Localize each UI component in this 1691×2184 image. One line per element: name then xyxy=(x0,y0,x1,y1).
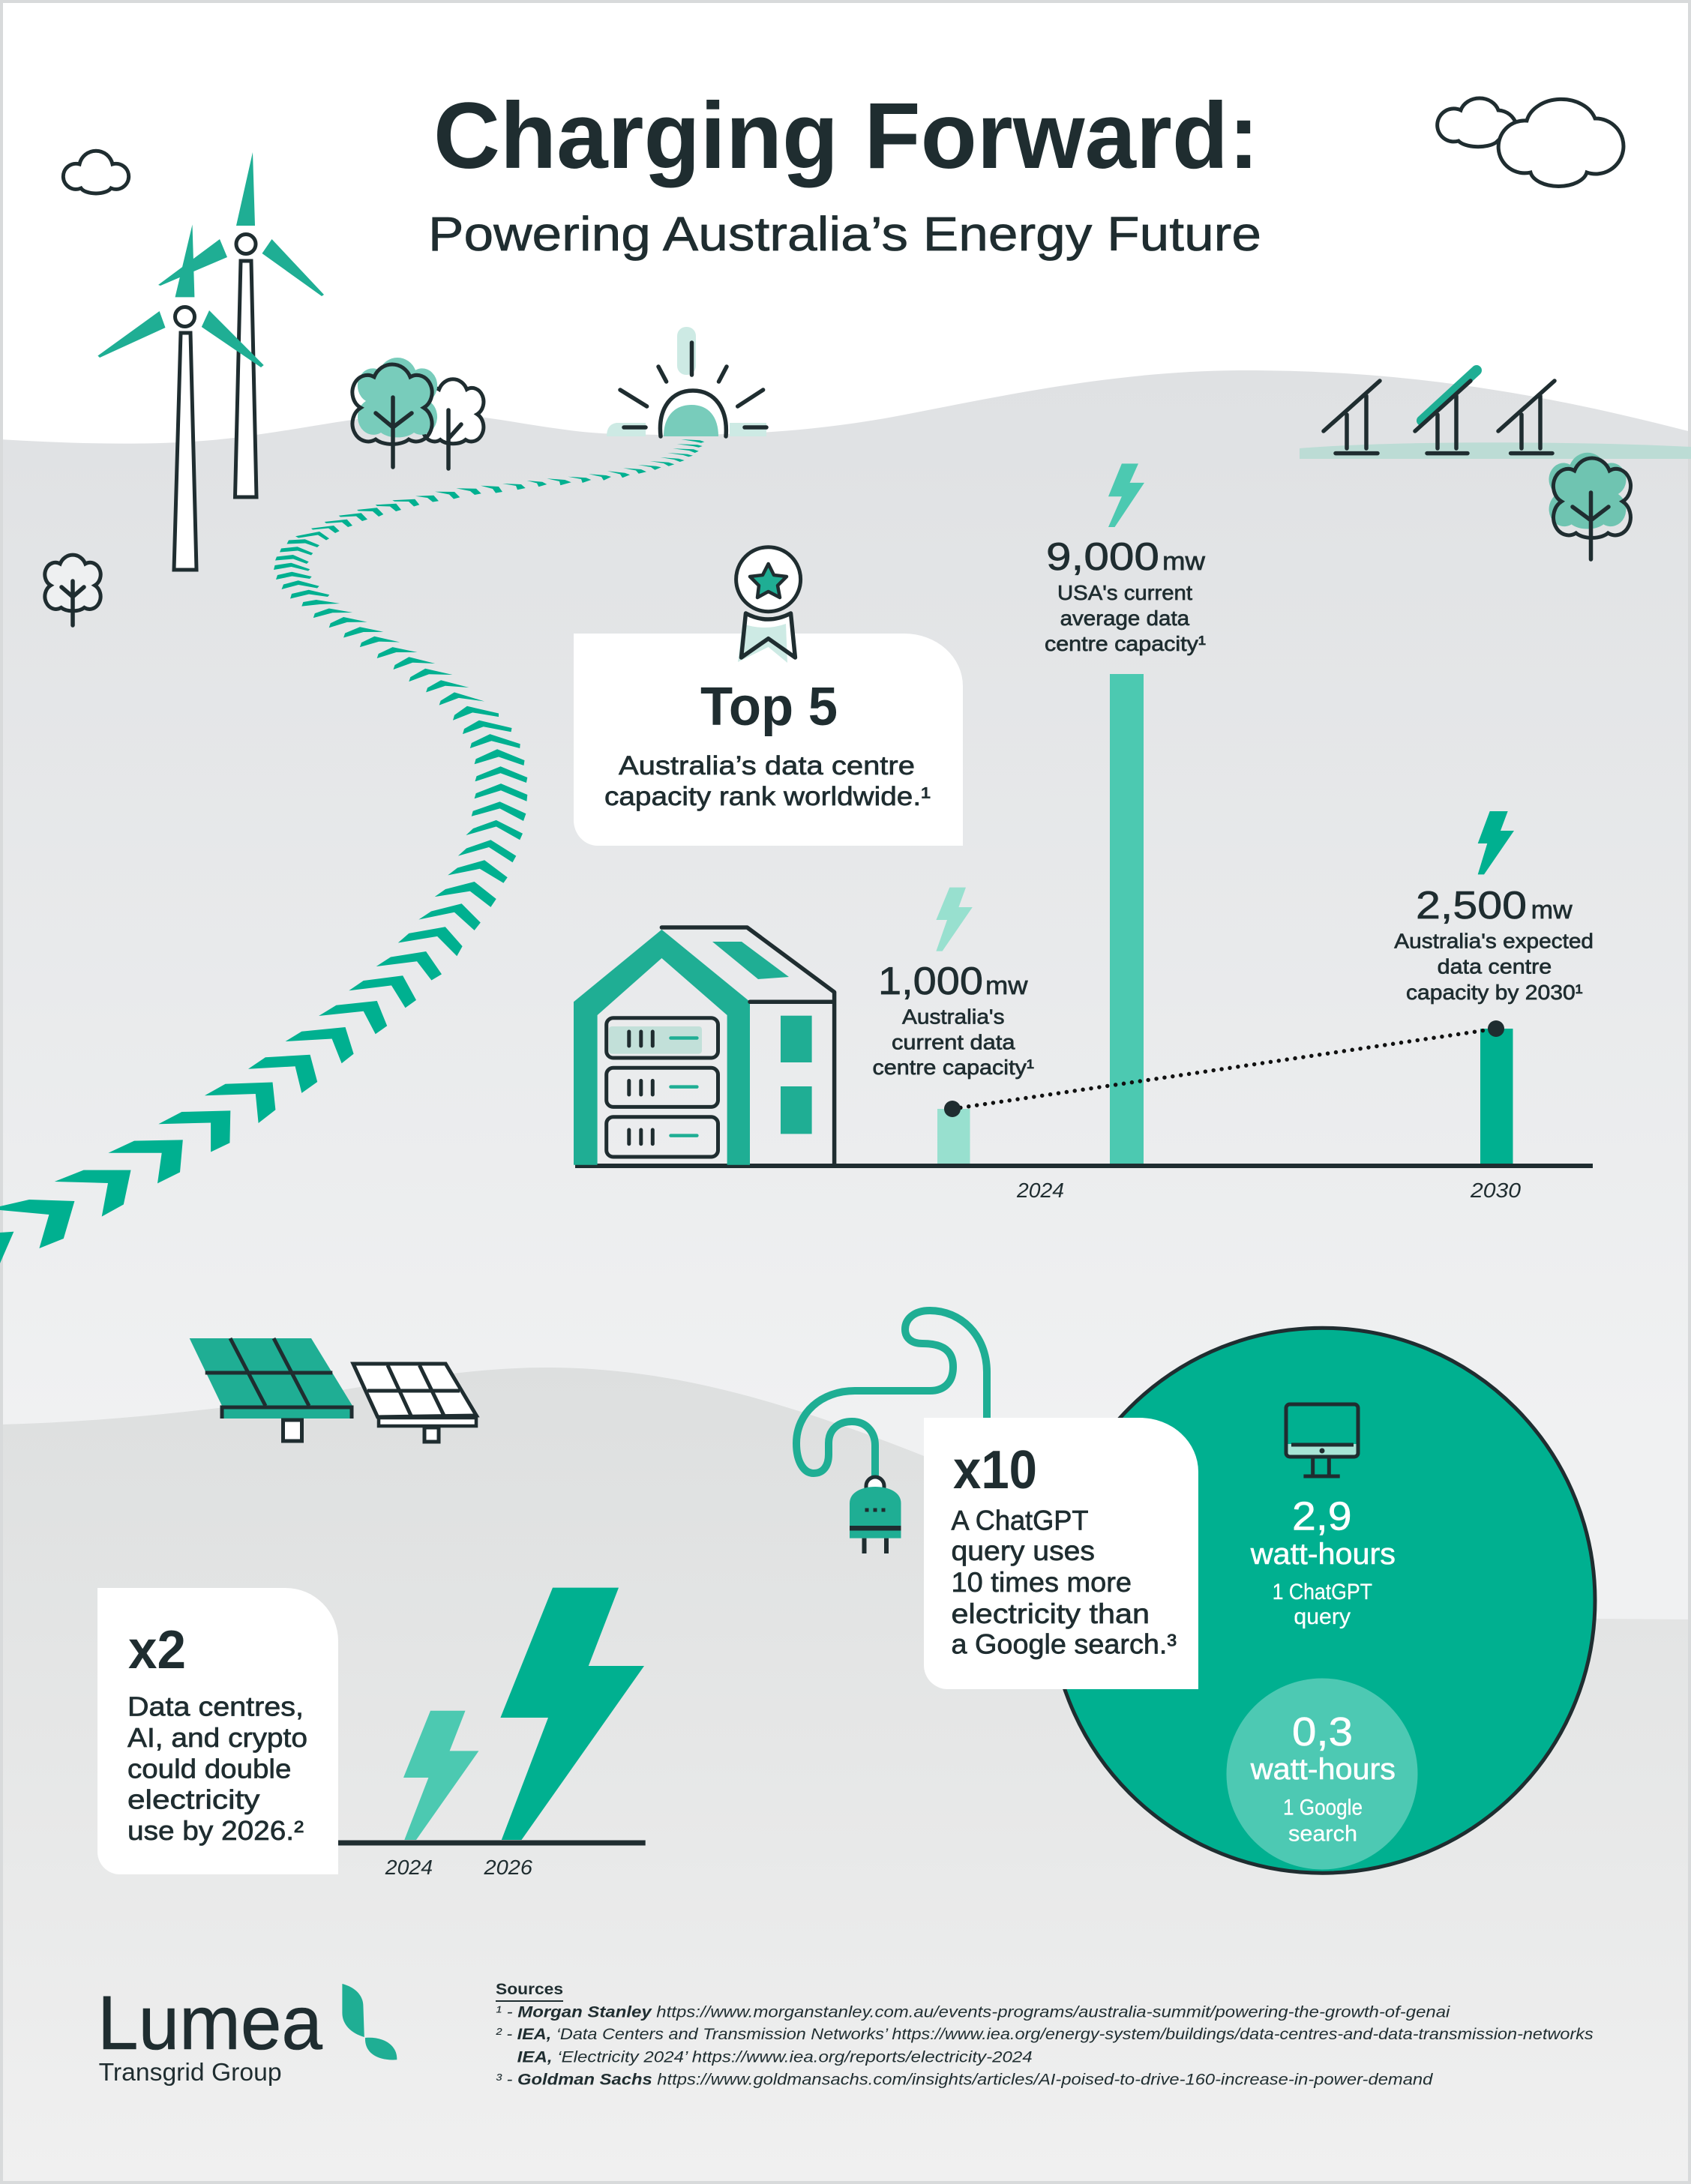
panel: top 5 card xyxy=(574,634,963,846)
callout: 2500 mw: 2,500 xyxy=(1416,884,1527,927)
logo: Lumea xyxy=(97,1980,397,2086)
text: doubling description: use by 2026.² xyxy=(127,1815,304,1846)
chart axis xyxy=(575,1164,1593,1168)
icon: sunrise xyxy=(607,327,766,436)
text: google value: watt-hours xyxy=(1250,1753,1396,1786)
axis labels: 2030 xyxy=(1470,1179,1521,1202)
icon: solar stands on hill xyxy=(1300,370,1691,459)
callout: 2500 mw: data centre xyxy=(1438,955,1552,978)
chart: lightning bolts 2024 vs 2026: 2026 xyxy=(483,1856,532,1879)
panel: x10 card xyxy=(924,1418,1198,1689)
text: rank description: capacity rank worldwide.¹ xyxy=(604,782,931,811)
text: google value: 0,3 xyxy=(1292,1709,1353,1754)
logo: Lumea: Transgrid Group xyxy=(99,2058,282,2086)
icon: small cloud xyxy=(63,151,129,193)
callout: 1000 mw: Australia's xyxy=(902,1005,1005,1028)
icon: plug and cord xyxy=(796,1311,987,1553)
small circle: google search xyxy=(1227,1678,1417,1870)
sources: IEA, ‘Electricity 2024’ https://www.iea.org/reports/electricity-2024 xyxy=(517,2049,1033,2066)
text: chatgpt description: a Google search.³ xyxy=(951,1629,1177,1660)
sources: ² - IEA, ‘Data Centers and Transmission Networks’ https://www.iea.org/energy-system/buildings/data-centres-and-data-transmission-networks xyxy=(496,2026,1594,2043)
callout: 1000 mw: centre capacity¹ xyxy=(873,1056,1034,1079)
chart: lightning bolts 2024 vs 2026: 2024 xyxy=(385,1856,433,1879)
heading: x10: x10 xyxy=(953,1440,1037,1500)
callout: 1000 mw: 1,000 xyxy=(878,960,983,1003)
text: chatgpt description: electricity than xyxy=(951,1598,1150,1629)
bar: 2024 Australia xyxy=(937,1109,970,1165)
text: doubling description: Data centres, xyxy=(127,1691,304,1721)
callout: 2500 mw: Australia's expected xyxy=(1394,929,1594,952)
panel: x2 card xyxy=(97,1588,338,1874)
icon: medal xyxy=(736,547,801,663)
callout: 9000 mw: 9,000 xyxy=(1046,535,1159,579)
icon: double cloud xyxy=(1438,98,1624,186)
text: chatgpt description: 10 times more xyxy=(951,1567,1132,1598)
text: rank description xyxy=(604,751,931,811)
logo: Lumea: Lumea xyxy=(97,1980,322,2066)
icon: small outline tree xyxy=(45,555,100,625)
heading: x2: x2 xyxy=(128,1620,186,1680)
text: doubling description: could double xyxy=(127,1754,291,1784)
icon: monitor xyxy=(1286,1404,1358,1476)
callout: 9000 mw xyxy=(1045,463,1206,655)
text: chatgpt description xyxy=(951,1505,1177,1660)
title: Charging Forward: xyxy=(433,84,1259,188)
callout: 9000 mw: average data xyxy=(1060,607,1190,630)
trend line dotted xyxy=(944,1020,1504,1117)
icon: white solar panel xyxy=(353,1364,476,1442)
icon: wind turbines xyxy=(97,152,324,570)
text: chatgpt description: query uses xyxy=(951,1535,1095,1566)
callout: 9000 mw: centre capacity¹ xyxy=(1045,632,1206,655)
text: chatgpt value xyxy=(1250,1493,1396,1629)
callout: 2500 mw xyxy=(1394,811,1594,1004)
callout: 9000 mw: USA's current xyxy=(1057,581,1192,604)
axis labels: 2024 xyxy=(1016,1179,1064,1202)
sources: ¹ - Morgan Stanley https://www.morganstanley.com.au/events-programs/australia-summit/powering-the-growth-of-genai xyxy=(496,2004,1451,2021)
icon: data centre building xyxy=(574,927,835,1165)
bar: USA xyxy=(1110,674,1144,1165)
sources xyxy=(496,1981,1594,2089)
bar: 2030 Australia xyxy=(1480,1029,1513,1165)
text: google value: search xyxy=(1288,1822,1357,1847)
callout: 1000 mw xyxy=(873,888,1034,1079)
icon: pair of trees xyxy=(352,358,484,469)
text: chatgpt value: 1 ChatGPT xyxy=(1273,1580,1372,1604)
callout: 1000 mw: current data xyxy=(892,1030,1015,1054)
text: google value xyxy=(1250,1709,1396,1847)
subtitle: Powering Australia’s Energy Future xyxy=(428,207,1261,261)
text: rank description: Australia’s data centre xyxy=(619,751,915,780)
text: chatgpt value: 2,9 xyxy=(1292,1493,1352,1538)
sources: Sources xyxy=(496,1981,563,1998)
text: doubling description xyxy=(127,1691,307,1846)
winding chevron road xyxy=(0,439,704,1263)
callout: 2500 mw: capacity by 2030¹ xyxy=(1406,981,1583,1004)
icon: teal tree xyxy=(1549,453,1631,559)
sources: ³ - Goldman Sachs https://www.goldmansachs.com/insights/articles/AI-poised-to-drive-160-increase-in-power-demand xyxy=(496,2072,1434,2089)
chart: data centre capacity xyxy=(575,674,1593,1202)
text: chatgpt value: watt-hours xyxy=(1250,1538,1396,1571)
chart: lightning bolts 2024 vs 2026 xyxy=(338,1588,646,1879)
text: doubling description: electricity xyxy=(127,1784,259,1814)
axis labels xyxy=(1016,1179,1521,1202)
callout: 2500 mw: mw xyxy=(1531,896,1573,924)
text: chatgpt description: A ChatGPT xyxy=(951,1505,1089,1535)
heading: top 5: Top 5 xyxy=(700,677,838,737)
text: doubling description: AI, and crypto xyxy=(127,1722,307,1753)
text: google value: 1 Google xyxy=(1283,1795,1363,1820)
chart: energy comparison circle xyxy=(1050,1328,1595,1873)
text: chatgpt value: query xyxy=(1294,1604,1351,1629)
callout: 9000 mw: mw xyxy=(1162,547,1205,576)
callout: 1000 mw: mw xyxy=(985,972,1028,1000)
icon: teal solar panel xyxy=(190,1338,352,1441)
